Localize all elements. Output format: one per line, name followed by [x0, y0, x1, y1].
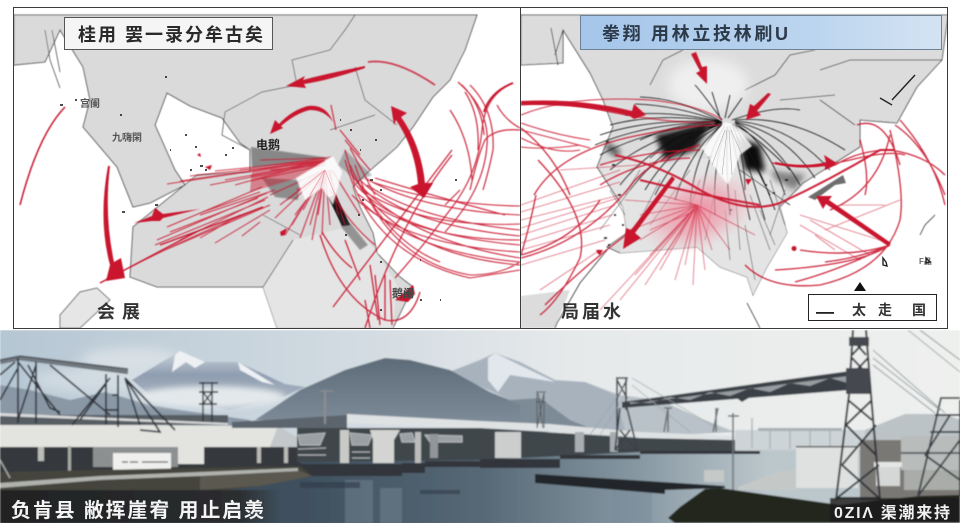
- dark mound foreground: [668, 488, 960, 523]
- central dark mountain: [255, 358, 520, 422]
- snow mountain left: [132, 351, 305, 410]
- water: [0, 450, 960, 524]
- arrow: north east inbound: [746, 93, 771, 120]
- label: legend box: [808, 282, 936, 320]
- spot marks: [197, 153, 287, 236]
- red ray fan from left hub: [20, 61, 520, 328]
- arrow: north loop west: [286, 66, 365, 88]
- bridge right span: [232, 414, 842, 476]
- label: legend box: 国: [912, 302, 926, 318]
- pier walkway: [535, 474, 725, 494]
- far mountains: [0, 385, 250, 430]
- arrow: double-headed coast: [391, 106, 433, 198]
- label: place far east: F品: [919, 257, 932, 266]
- dark masses: [606, 122, 805, 190]
- photo: industrial harbour with bridges and mountains: [0, 330, 960, 524]
- tower mid river: [615, 378, 638, 452]
- hill under the right snow mountain: [480, 388, 600, 432]
- land masses: [521, 15, 948, 328]
- near bridge deck left: [0, 447, 300, 472]
- arrow: south-east diagonal: [816, 196, 891, 246]
- white cone at right hub: [702, 122, 752, 185]
- panel: right route map: [521, 8, 948, 328]
- panel: left route map: [14, 8, 520, 328]
- black ray fan from right hub: [595, 85, 845, 280]
- far tower right edge: [918, 398, 960, 496]
- map frames: [14, 8, 948, 328]
- land masses: [14, 15, 477, 328]
- utility poles: [664, 408, 739, 490]
- gantry tower left: [0, 356, 175, 432]
- shore and walkway: [0, 375, 312, 497]
- label: place peninsula: 九嗨閑: [112, 131, 142, 144]
- label: photo caption right: 0ZIΛ 渠潮来持: [834, 503, 950, 522]
- big tower right: [836, 330, 880, 500]
- Japan-like island: [808, 175, 846, 200]
- sky: [0, 330, 960, 440]
- label: blue title box: 拳翔 用林立技林刷U: [602, 23, 788, 44]
- arrow: north down: [691, 52, 707, 84]
- red route lines: [521, 99, 945, 315]
- spot marks: [596, 179, 797, 255]
- arrow: south-west diagonal: [623, 176, 675, 249]
- small white building: [113, 453, 171, 473]
- waterfront buildings: [704, 436, 960, 500]
- label: place north-west: 宫阑: [80, 97, 100, 110]
- label: place south: 局届水: [561, 302, 621, 322]
- label: blue title box: [580, 16, 942, 50]
- caption band: [0, 490, 280, 523]
- island marks: [880, 75, 930, 266]
- label: map title box: [64, 18, 272, 50]
- label: place south-east: 鹅阑: [392, 286, 414, 300]
- arrow: small south marker: [395, 285, 415, 302]
- truss span to big tower: [622, 371, 850, 408]
- label: place south-west: 会 展: [97, 302, 140, 322]
- arrow: west landing: [134, 208, 200, 223]
- distant tower centre-left: [199, 382, 218, 422]
- dark hatching around left hub: [60, 77, 457, 310]
- arrow: west thick: [521, 100, 646, 119]
- label: place near hub: 电鹅: [256, 137, 280, 152]
- snow mountain right: [449, 353, 625, 430]
- label: legend box: 太: [852, 302, 866, 318]
- arrow: west ocean long: [103, 166, 125, 281]
- label: photo caption left: 负肯县 敝挥崖宥 用止启羡: [11, 498, 264, 522]
- arrow: east inbound: [775, 155, 836, 170]
- white burst at left hub: [296, 156, 342, 205]
- arrow: curve to west hub label: [270, 106, 333, 134]
- label: map title box: 桂用 罢一录分牟古矣: [78, 24, 263, 45]
- label: legend box: 走: [878, 302, 892, 318]
- pink burst: [644, 173, 751, 250]
- distant hazy bridge: [758, 428, 842, 431]
